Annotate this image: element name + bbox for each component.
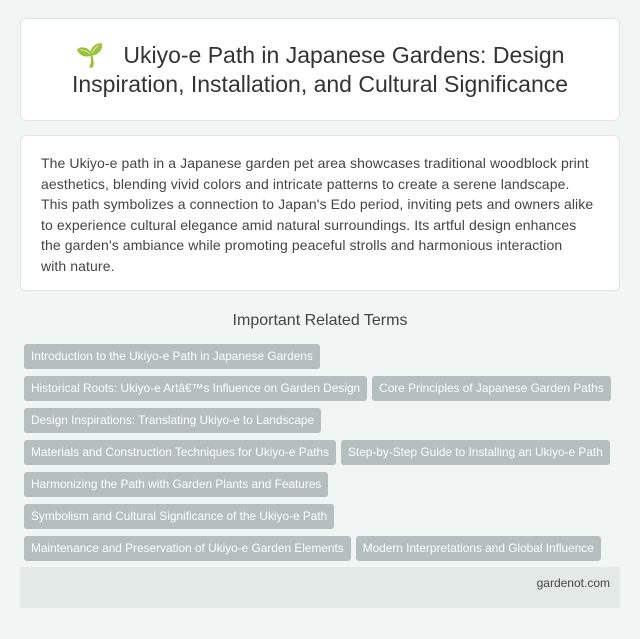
- tags: [24, 344, 611, 561]
- tags: Maintenance and Preservation of Ukiyo-e Garden Elements: [31, 541, 344, 555]
- footer: [20, 567, 620, 608]
- description panel: The Ukiyo-e path in a Japanese garden pet area showcases traditional woodblock print: [41, 155, 589, 171]
- tags: Introduction to the Ukiyo-e Path in Japanese Gardens: [31, 349, 313, 363]
- description panel: the garden's ambiance while promoting peaceful strolls and harmonious interaction: [41, 237, 562, 253]
- title: 🌱 Ukiyo-e Path in Japanese Gardens: Design: [76, 42, 564, 68]
- description panel: aesthetics, blending vivid colors and intricate patterns to create a serene landscape.: [41, 176, 569, 192]
- title: [20, 18, 620, 121]
- description panel: This path symbolizes a connection to Japan's Edo period, inviting pets and owners alike: [41, 196, 593, 212]
- tags: Step-by-Step Guide to Installing an Ukiyo-e Path: [348, 445, 603, 459]
- tags: Core Principles of Japanese Garden Paths: [379, 381, 604, 395]
- description panel: [20, 135, 620, 291]
- description panel: with nature.: [41, 258, 115, 274]
- title: Inspiration, Installation, and Cultural Significance: [72, 70, 568, 96]
- tags: Harmonizing the Path with Garden Plants and Features: [31, 477, 321, 491]
- heading: related terms: Important Related Terms: [233, 312, 407, 329]
- tags: Symbolism and Cultural Significance of the Ukiyo-e Path: [31, 509, 327, 523]
- tags: Materials and Construction Techniques for Ukiyo-e Paths: [31, 445, 329, 459]
- description panel: to experience cultural elegance amid natural surroundings. Its artful design enhances: [41, 216, 576, 232]
- tags: Historical Roots: Ukiyo-e Artâ€™s Influence on Garden Design: [31, 381, 360, 395]
- tags: Design Inspirations: Translating Ukiyo-e to Landscape: [31, 413, 314, 427]
- footer: gardenot.com: [537, 576, 610, 590]
- tags: Modern Interpretations and Global Influence: [363, 541, 594, 555]
